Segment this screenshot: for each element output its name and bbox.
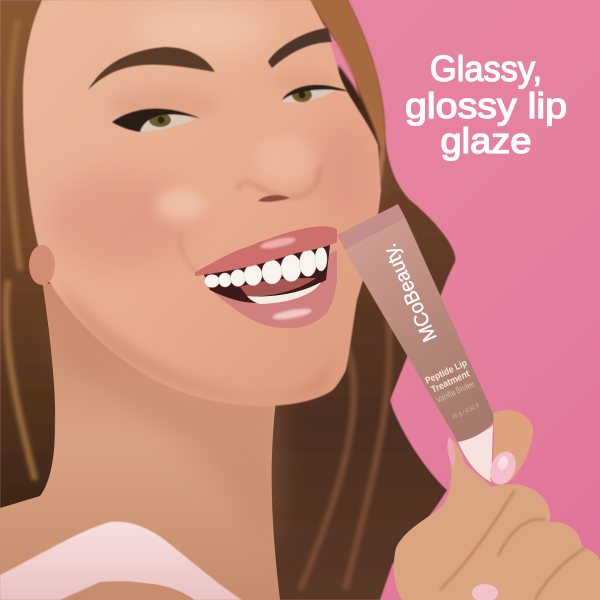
headline: glossy lip [405, 85, 567, 126]
neckline skin below strap [78, 583, 195, 600]
eye right [282, 85, 350, 102]
jaw shadow [60, 280, 335, 400]
finger creases [440, 490, 545, 590]
eyebrow right [268, 28, 332, 68]
mouth interior [203, 245, 330, 303]
ear [29, 245, 55, 285]
nose [238, 136, 320, 202]
forehead highlight [130, 5, 270, 55]
mouth [195, 226, 337, 328]
tube body [345, 217, 494, 442]
neck and chest skin [0, 280, 280, 600]
lip gloss highlights [260, 235, 296, 251]
upper teeth [204, 247, 327, 288]
neck shadow [60, 310, 280, 560]
eye shadow tone [110, 89, 220, 121]
product tube: 15 g / 0.52 fl [451, 403, 480, 421]
headline [405, 48, 567, 161]
hair right of face [265, 0, 455, 600]
cheek highlight [156, 189, 204, 221]
hair left side [0, 0, 76, 510]
headline: glaze [440, 120, 532, 161]
hand [394, 437, 600, 600]
thumb nail sliver [447, 437, 455, 468]
eye left [112, 109, 200, 132]
top orange hair [310, 0, 385, 185]
thumb and palm [394, 437, 600, 600]
headline: Glassy, [430, 48, 542, 89]
tube crimp [337, 204, 405, 250]
lower nail [472, 584, 498, 600]
tank top strap [0, 522, 242, 600]
lower teeth [247, 282, 321, 304]
nail [486, 448, 520, 488]
face [23, 0, 381, 406]
tongue [240, 278, 316, 296]
product tube: Treatment [430, 368, 472, 396]
product tube: Vanilla Brulee [435, 378, 476, 405]
smile crease [180, 232, 195, 272]
cheek blush [45, 170, 195, 270]
brand text: MCoBeauty. [379, 240, 442, 345]
product name: Peptide Lip [424, 358, 469, 387]
eyebrow left [88, 47, 215, 90]
product tube [337, 204, 494, 482]
index finger [486, 410, 533, 488]
upper lip [195, 226, 337, 276]
white cap [458, 425, 493, 482]
lower lip [205, 250, 337, 328]
shadow behind eye [338, 65, 380, 170]
